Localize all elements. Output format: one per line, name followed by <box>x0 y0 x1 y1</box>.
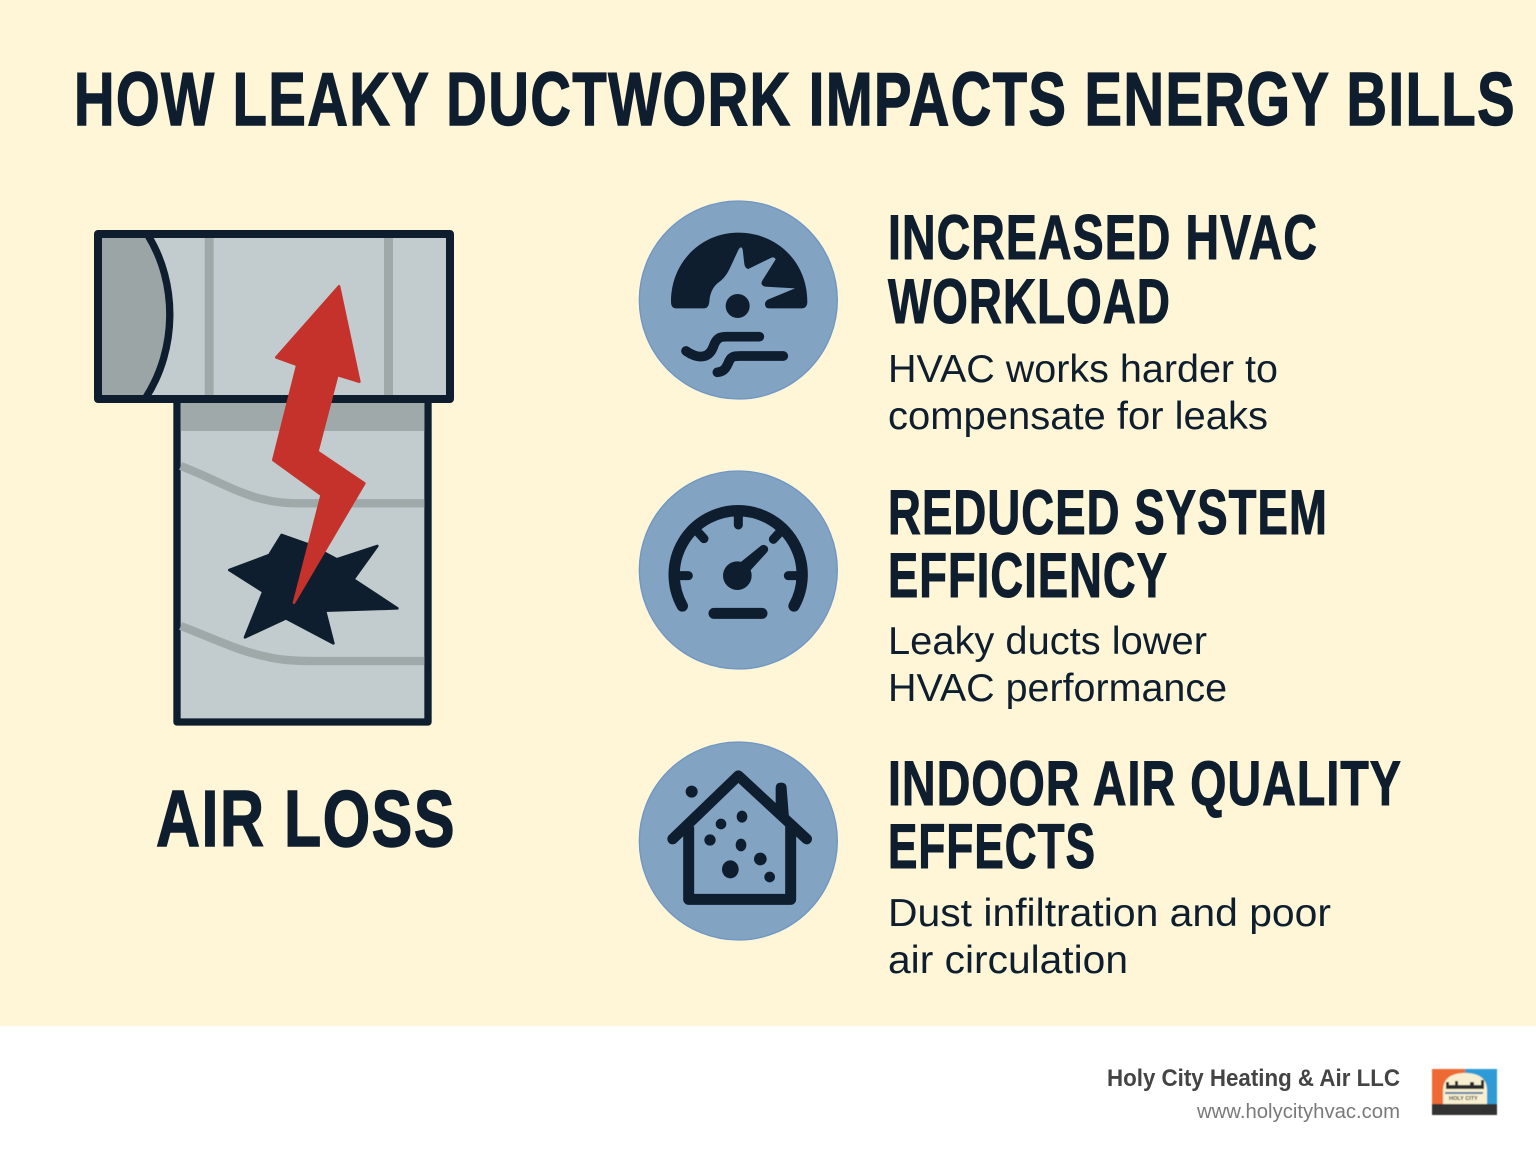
hole in duct <box>229 535 397 643</box>
illustration: leaking air duct <box>98 234 450 722</box>
body text: Dust infiltration and poor <box>888 892 1331 935</box>
heading line 2: WORKLOAD <box>888 267 1171 337</box>
heading: reduced system efficiency: REDUCED SYSTEM <box>888 478 1328 548</box>
footer company name: Holy City Heating & Air LLC <box>1107 1065 1400 1092</box>
upper duct section <box>98 234 450 399</box>
footer website: www.holycityhvac.com <box>1196 1101 1400 1123</box>
company logo: HOLY CITY <box>1449 1096 1478 1102</box>
icon: house with dust <box>639 742 837 940</box>
body text line 2: HVAC performance <box>888 667 1227 710</box>
icon: speedometer <box>639 471 837 669</box>
body text line 2: air circulation <box>888 939 1128 982</box>
heading: increased hvac workload: INCREASED HVAC <box>888 203 1318 273</box>
body text: Leaky ducts lower <box>888 620 1207 663</box>
icon: workload gauge <box>639 201 837 399</box>
heading line 2: EFFICIENCY <box>888 541 1168 611</box>
body text: HVAC works harder to <box>888 348 1278 391</box>
body text line 2: compensate for leaks <box>888 395 1268 438</box>
air loss label: AIR LOSS <box>156 774 456 863</box>
lower duct section <box>177 397 428 722</box>
company logo <box>1432 1069 1497 1115</box>
red air loss arrow <box>273 286 364 603</box>
heading line 2: EFFECTS <box>888 812 1096 882</box>
